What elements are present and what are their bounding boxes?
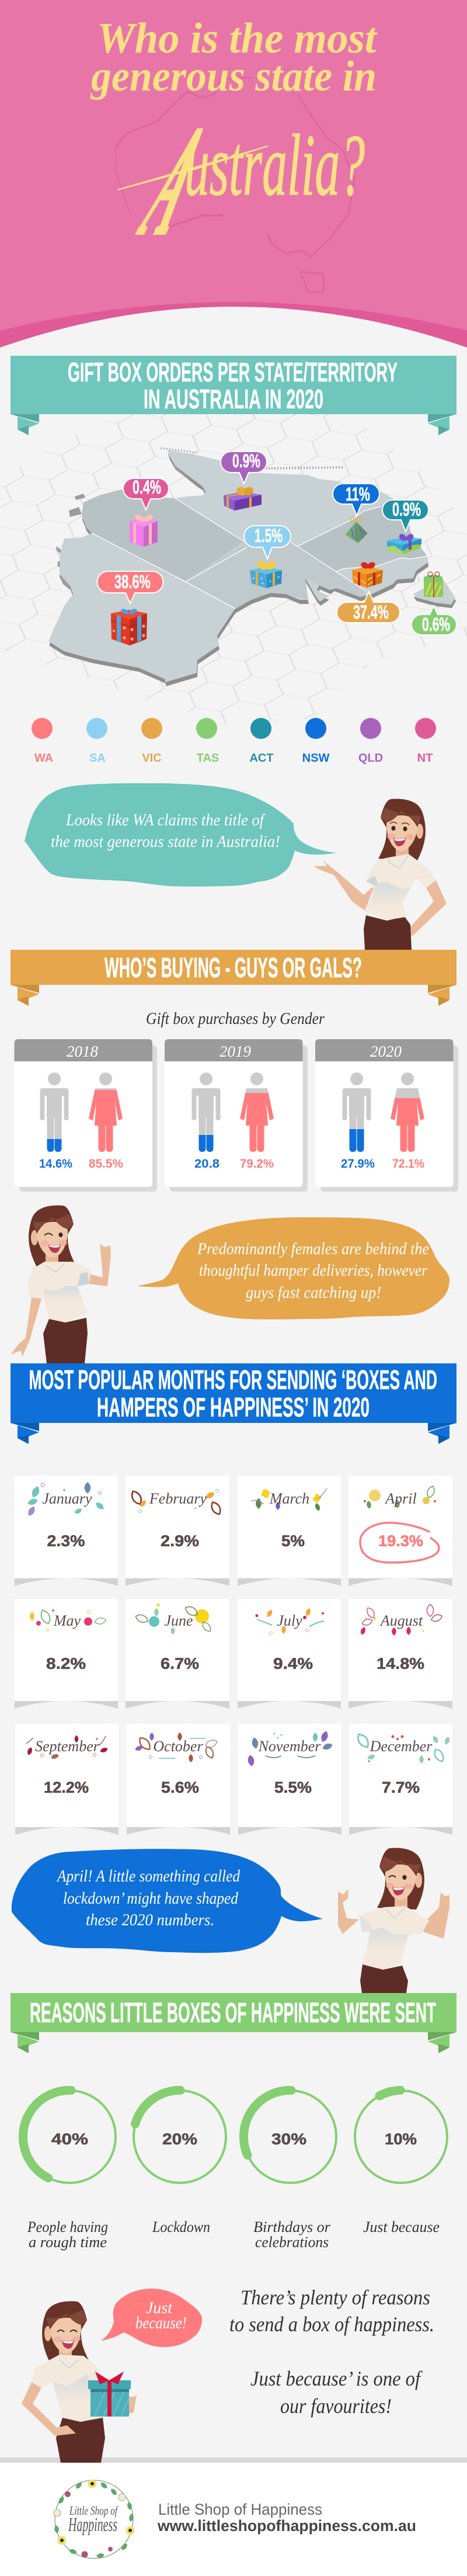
legend: NT — [417, 752, 433, 765]
month card: July: 9.4% — [273, 1655, 313, 1672]
logo: wreath: Happiness — [68, 2514, 117, 2536]
month card: July: July — [277, 1612, 302, 1629]
legend: ACT — [249, 752, 274, 765]
speech bubble: April: these 2020 numbers. — [86, 1911, 214, 1929]
ring: 40%: 40% — [51, 2130, 88, 2148]
month card: May: May — [53, 1612, 81, 1629]
gender card 2018 — [14, 1039, 157, 1192]
speech bubble: April: lockdown’ might have shaped — [63, 1889, 238, 1908]
character: woman winking — [11, 1206, 111, 1363]
speech bubble: April — [12, 1849, 323, 1953]
teal section banner — [11, 356, 456, 435]
month card: January — [15, 1476, 118, 1586]
legend: WA — [34, 752, 53, 765]
month card: October — [127, 1724, 230, 1835]
icon: NSW gift — [346, 518, 368, 543]
legend — [32, 718, 436, 765]
icon: man 2018 — [40, 1072, 69, 1152]
icon: TAS gift — [424, 572, 443, 598]
month card: October: 5.6% — [161, 1779, 199, 1796]
speech bubble: April: April! A little something called — [56, 1867, 240, 1886]
icon: NT gift — [130, 513, 158, 547]
month card: May — [15, 1599, 118, 1709]
ring captions: People having — [27, 2219, 108, 2235]
QLD pin: 0.9% — [232, 450, 260, 471]
character: woman flexing — [338, 1848, 449, 1993]
gender card 2020: 2020 — [370, 1043, 402, 1060]
gender card 2018: 2018 — [67, 1043, 98, 1060]
speech bubble: females: guys fast catching up! — [246, 1283, 381, 1302]
VIC pin — [337, 561, 400, 623]
closing text: There’s plenty of reasons — [241, 2286, 430, 2309]
gender card 2020: 72.1% — [392, 1157, 424, 1171]
ACT pin: 0.9% — [392, 499, 421, 520]
map outline behind title — [116, 77, 354, 293]
legend: SA — [89, 752, 106, 765]
month card: December — [349, 1724, 452, 1835]
ring captions: a rough time — [29, 2234, 107, 2251]
month card: October: October — [153, 1738, 203, 1755]
month card: August: August — [379, 1612, 423, 1629]
title: A — [120, 93, 232, 268]
month card: March: March — [269, 1490, 309, 1507]
month card: November — [238, 1724, 341, 1835]
month card: September: September — [35, 1738, 100, 1755]
orange section banner — [11, 950, 456, 1006]
speech bubble: females: thoughtful hamper deliveries, however — [199, 1261, 428, 1280]
ring captions: Just because — [363, 2219, 440, 2235]
icon: man 2019 — [191, 1072, 221, 1152]
QLD pin — [221, 450, 267, 511]
month card: February: 2.9% — [161, 1532, 199, 1550]
month card: June: 6.7% — [161, 1655, 199, 1672]
legend: TAS — [197, 752, 219, 765]
ring captions — [27, 2219, 440, 2251]
ring: 20%: 20% — [162, 2130, 197, 2148]
header panel — [0, 0, 467, 356]
month card: February — [126, 1476, 229, 1586]
ring: 40% — [23, 2090, 116, 2183]
speech bubble: females: Predominantly females are behind the — [197, 1240, 429, 1258]
ring captions: Birthdays or — [253, 2219, 331, 2235]
SA pin — [244, 525, 291, 588]
month card: September: 12.2% — [44, 1779, 89, 1796]
month card: September — [15, 1724, 119, 1835]
footer brand text: Little Shop of Happiness — [158, 2501, 322, 2518]
gender card 2018: 14.6% — [39, 1157, 72, 1171]
icon: VIC gift — [352, 561, 383, 588]
character: woman pointing — [313, 799, 447, 950]
month card: June — [126, 1599, 229, 1709]
TAS pin — [412, 572, 456, 635]
month card: February: February — [149, 1490, 207, 1507]
speech bubble: WA — [25, 783, 337, 887]
month card: November: 5.5% — [274, 1779, 312, 1796]
closing text: Just because’ is one of — [250, 2367, 423, 2390]
icon: woman 2018 — [89, 1072, 123, 1152]
icon: WA gift — [111, 607, 147, 645]
icon: QLD gift — [224, 485, 262, 511]
icon: gift held — [88, 2372, 137, 2417]
logo: wreath: Little Shop of — [69, 2504, 119, 2518]
closing text — [229, 2286, 434, 2418]
green section banner — [11, 1993, 456, 2053]
gender card 2019: 79.2% — [240, 1157, 274, 1171]
title — [90, 15, 378, 268]
TAS pin: 0.6% — [422, 614, 450, 635]
month card: March — [238, 1476, 341, 1586]
month card: November: November — [258, 1738, 321, 1755]
gender card 2020 — [315, 1039, 458, 1192]
WA pin: 38.6% — [114, 571, 151, 592]
legend: VIC — [142, 752, 162, 765]
month card: January: 2.3% — [47, 1532, 85, 1550]
footer brand text: www.littleshopofhappiness.com.au — [157, 2517, 416, 2535]
title: Who is the most — [97, 15, 378, 63]
month card: December: 7.7% — [382, 1779, 420, 1796]
ring: 30% — [243, 2090, 336, 2183]
ring: 10%: 10% — [385, 2130, 417, 2148]
month card: July — [238, 1599, 341, 1709]
logo: wreath — [54, 2479, 134, 2558]
icon: ACT gift — [387, 533, 421, 554]
VIC pin: 37.4% — [353, 602, 389, 623]
month card: May: 8.2% — [46, 1655, 86, 1672]
speech bubble: WA: the most generous state in Australia! — [51, 832, 280, 851]
icon: woman 2020 — [391, 1072, 424, 1152]
month card: April: April — [384, 1490, 417, 1507]
month card: August: 14.8% — [377, 1655, 424, 1672]
subheading: Gift box purchases by Gender — [146, 1010, 325, 1028]
month card: August — [348, 1599, 452, 1709]
month card: April: 19.3% — [378, 1532, 423, 1550]
footer brand text — [157, 2501, 416, 2535]
ring captions: Lockdown — [152, 2219, 210, 2235]
ring captions: celebrations — [255, 2234, 329, 2251]
month card: April — [348, 1476, 452, 1586]
blue section banner — [11, 1363, 456, 1444]
gender card 2019 — [165, 1039, 308, 1192]
teal section banner: IN AUSTRALIA IN 2020 — [144, 384, 323, 414]
NT pin: 0.4% — [133, 477, 161, 498]
month card: March: 5% — [281, 1532, 305, 1550]
closing text: to send a box of happiness. — [229, 2313, 434, 2336]
month card: December: December — [370, 1738, 433, 1755]
ring: 30%: 30% — [271, 2130, 306, 2148]
NSW pin: 11% — [346, 484, 370, 505]
icon: woman 2019 — [240, 1072, 274, 1152]
ring: 20% — [134, 2090, 226, 2183]
gender card 2019: 20.8 — [194, 1157, 219, 1171]
NT pin — [123, 477, 169, 547]
SA pin: 1.5% — [255, 525, 283, 546]
ACT pin — [382, 499, 428, 554]
month card: January: January — [42, 1490, 92, 1507]
legend: QLD — [358, 752, 383, 765]
gender card 2018: 85.5% — [89, 1157, 123, 1171]
closing text: our favourites! — [280, 2394, 392, 2418]
title: generous state in — [90, 53, 377, 100]
WA pin — [97, 571, 163, 645]
speech bubble: WA: Looks like WA claims the title of — [65, 811, 266, 829]
legend: NSW — [302, 752, 329, 765]
speech bubble: just because: Just — [146, 2299, 173, 2317]
callout: April highlight ring — [360, 1523, 439, 1563]
speech bubble: just because: because! — [135, 2314, 187, 2332]
gender card 2020: 27.9% — [341, 1157, 375, 1171]
month card: June: June — [164, 1612, 193, 1629]
character: woman holding gift — [22, 2301, 137, 2463]
icon: man 2020 — [342, 1072, 371, 1152]
NSW pin — [333, 484, 379, 543]
ring: 10% — [355, 2090, 447, 2183]
gender card 2019: 2019 — [219, 1043, 251, 1060]
speech bubble: just because — [101, 2289, 202, 2347]
footer divider and panel — [0, 2457, 467, 2576]
icon: SA gift — [250, 560, 282, 588]
australia map — [48, 448, 456, 686]
speech bubble: females — [137, 1217, 449, 1320]
